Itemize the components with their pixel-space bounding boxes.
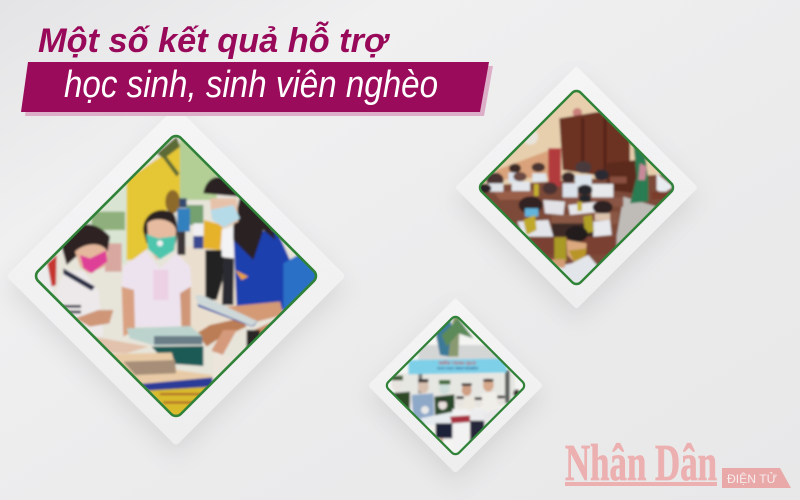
middle row pupils xyxy=(543,182,557,194)
border: donation diamond xyxy=(385,315,526,456)
front pupil xyxy=(565,226,588,242)
border: classroom diamond xyxy=(478,89,675,286)
back row pupils xyxy=(486,173,504,187)
panel: classroom photo diamond xyxy=(461,90,692,314)
banner xyxy=(408,358,507,374)
logo tag xyxy=(722,468,791,488)
pupils xyxy=(421,406,429,414)
banner: CHO HỌC SINH NGHÈO xyxy=(437,365,479,370)
banner bar xyxy=(21,62,489,112)
teacher xyxy=(630,143,648,203)
girl volunteer xyxy=(233,230,290,317)
banner: ĐIỂN TẶNG QUÀ xyxy=(439,359,477,365)
frame: large diamond xyxy=(6,106,346,446)
arms xyxy=(227,302,283,323)
subtitle banner xyxy=(21,62,493,116)
border: large diamond xyxy=(33,133,319,419)
photo: classroom of masked pupils xyxy=(481,92,672,282)
middle girl xyxy=(143,210,177,245)
banner shadow xyxy=(25,66,493,116)
table and books xyxy=(93,337,148,353)
books held xyxy=(195,295,258,327)
frame: classroom diamond xyxy=(455,66,698,309)
photo: border guards giving gifts to pupils xyxy=(390,318,520,443)
panel: large photo diamond xyxy=(6,106,346,446)
frame: donation diamond xyxy=(368,298,543,473)
title: Một số kết quả hỗ trợ xyxy=(38,22,390,60)
logo wordmark: Nhân Dân xyxy=(565,435,717,492)
logo underline xyxy=(565,482,717,486)
left girl xyxy=(62,224,110,265)
desks xyxy=(493,190,533,200)
logo: Nhân Dân Điện Tử xyxy=(565,435,791,492)
panel: donation photo diamond xyxy=(368,298,543,473)
logo tag text: ĐIỆN TỬ xyxy=(727,471,777,486)
adults xyxy=(392,380,396,390)
background people xyxy=(177,208,190,232)
photo: students and volunteers at a book table xyxy=(46,137,315,415)
subtitle: học sinh, sinh viên nghèo xyxy=(64,64,438,106)
